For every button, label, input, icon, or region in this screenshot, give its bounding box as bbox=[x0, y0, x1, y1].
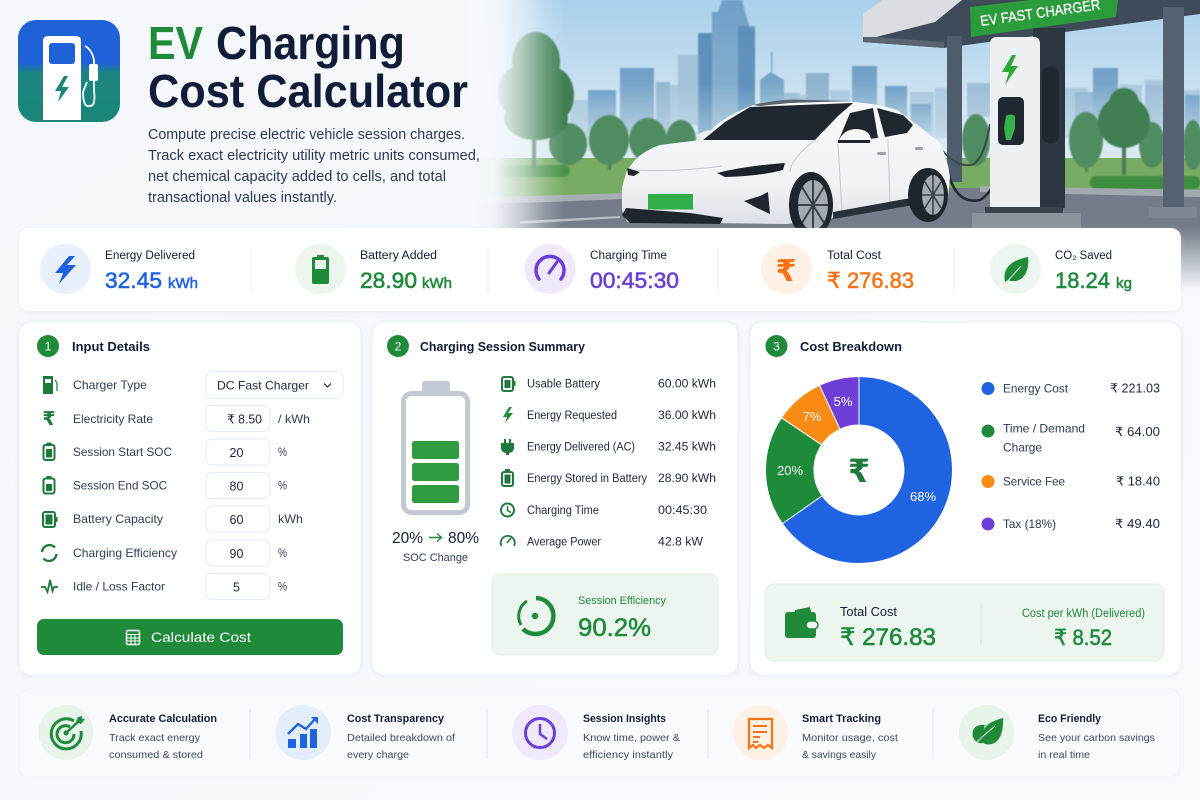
feature: eco friendly: Eco Friendly bbox=[1038, 713, 1102, 725]
feature: session insights: Session Insights bbox=[583, 713, 666, 725]
metric: battery added: Battery Added bbox=[360, 250, 437, 262]
panel: cost breakdown bbox=[750, 322, 1181, 675]
step badge 1 bbox=[37, 335, 59, 357]
legend: service fee bbox=[982, 474, 1160, 488]
rear wheel bbox=[908, 168, 948, 222]
mirrors bbox=[698, 129, 871, 143]
row: charger type: DC Fast Charger bbox=[217, 378, 309, 392]
metric: energy delivered: kWh bbox=[168, 275, 198, 292]
SOC change label: 20% bbox=[392, 530, 423, 547]
metric: energy delivered bbox=[40, 244, 198, 294]
charger station bbox=[972, 28, 1081, 228]
row: charger type bbox=[43, 372, 343, 398]
car body bbox=[622, 100, 950, 224]
summary row: charging time: Charging Time bbox=[527, 505, 599, 517]
session efficiency callout: 90.2% bbox=[578, 614, 651, 642]
legend: service fee: ₹ 18.40 bbox=[1116, 474, 1160, 488]
summary row: average power bbox=[501, 536, 703, 548]
intro paragraph bbox=[148, 127, 480, 206]
metric: energy delivered: 32.45 bbox=[105, 268, 162, 293]
summary row: energy delivered: Energy Delivered (AC) bbox=[527, 442, 635, 454]
row: session start SOC bbox=[44, 439, 287, 465]
row: electricity rate bbox=[42, 406, 310, 432]
body panel lines bbox=[634, 140, 890, 212]
summary row: charging time bbox=[501, 504, 707, 517]
title bbox=[148, 17, 468, 117]
intro paragraph: Compute precise electric vehicle session charges. bbox=[148, 127, 465, 143]
horizon haze bbox=[570, 92, 1200, 150]
legend: energy cost bbox=[982, 382, 1160, 396]
SOC change label: 80% bbox=[448, 530, 479, 547]
legend: energy cost: ₹ 221.03 bbox=[1110, 382, 1160, 396]
summary row: energy requested bbox=[503, 407, 716, 423]
panel: feature strip bbox=[19, 689, 1180, 777]
feature: session insights: efficiency instantly bbox=[583, 749, 674, 761]
metric: charging time bbox=[524, 244, 679, 294]
heading: input details: Input Details bbox=[72, 339, 150, 354]
row: electricity rate: ₹ 8.50 bbox=[227, 412, 262, 426]
row: electricity rate: Electricity Rate bbox=[73, 412, 153, 426]
row: charging efficiency bbox=[42, 540, 287, 566]
SOC change label: SOC Change bbox=[403, 552, 468, 564]
feature: cost transparency: Detailed breakdown of bbox=[347, 732, 455, 744]
legend: service fee: Service Fee bbox=[1003, 474, 1065, 488]
row: idle and loss factor: % bbox=[278, 580, 287, 594]
legend: time and demand charge bbox=[982, 422, 1160, 454]
feature: cost transparency: Cost Transparency bbox=[347, 713, 445, 725]
row: idle and loss factor bbox=[41, 574, 287, 600]
button: calculate cost: Calculate Cost bbox=[151, 629, 251, 645]
side windows bbox=[838, 108, 913, 142]
feature: eco friendly: See your carbon savings bbox=[1038, 732, 1155, 744]
summary row: energy requested: 36.00 kWh bbox=[658, 410, 716, 422]
panel: input details bbox=[19, 322, 361, 675]
slice: time and demand charge bbox=[766, 418, 822, 524]
row: session end SOC: 80 bbox=[230, 480, 243, 494]
slice: energy cost bbox=[782, 376, 953, 563]
trees bbox=[498, 32, 1200, 189]
lawn bbox=[496, 158, 1200, 197]
metric: CO2 saved: CO₂ Saved bbox=[1055, 250, 1112, 262]
feature: cost transparency: every charge bbox=[347, 749, 409, 761]
summary row: usable battery bbox=[502, 377, 716, 391]
grille and lower intake bbox=[622, 208, 723, 224]
summary row: energy requested: Energy Requested bbox=[527, 410, 617, 422]
intro paragraph: Track exact electricity utility metric units consumed, bbox=[148, 148, 480, 164]
total cost callout: ₹ 8.52 bbox=[1054, 625, 1112, 650]
metric: CO2 saved: kg bbox=[1116, 275, 1132, 292]
row: charging efficiency: 90 bbox=[230, 547, 243, 561]
donut chart: ₹ bbox=[848, 453, 870, 489]
feature: smart tracking: Monitor usage, cost bbox=[802, 732, 898, 744]
legend: energy cost: Energy Cost bbox=[1003, 382, 1069, 396]
feature: accurate calculation: consumed & stored bbox=[109, 749, 203, 761]
battery graphic bbox=[404, 381, 468, 512]
feature: session insights bbox=[512, 705, 680, 761]
panel: charging session summary bbox=[372, 322, 738, 675]
donut chart bbox=[766, 376, 953, 563]
session efficiency callout: Session Efficiency bbox=[578, 595, 666, 607]
row: idle and loss factor: 5 bbox=[233, 580, 240, 594]
metric: battery added bbox=[295, 244, 452, 294]
car bbox=[622, 100, 950, 238]
intro paragraph: net chemical capacity added to cells, and total bbox=[148, 169, 446, 185]
headlights bbox=[627, 163, 785, 177]
legend: tax: ₹ 49.40 bbox=[1115, 517, 1160, 531]
hero illustration: electric car at fast charger bbox=[470, 0, 1200, 290]
donut chart: 68% bbox=[910, 489, 936, 504]
row: battery capacity: kWh bbox=[278, 512, 303, 526]
summary row: average power: Average Power bbox=[527, 536, 601, 548]
feature: smart tracking bbox=[733, 705, 898, 761]
metric: total cost: ₹ 276.83 bbox=[827, 268, 914, 293]
session efficiency callout bbox=[492, 574, 718, 655]
feature: smart tracking: Smart Tracking bbox=[802, 713, 881, 725]
slice: tax bbox=[820, 376, 859, 429]
total cost callout: Total Cost bbox=[840, 604, 897, 619]
row: battery capacity bbox=[43, 506, 303, 532]
metric: total cost: Total Cost bbox=[827, 250, 882, 262]
sill bbox=[833, 198, 910, 219]
front wheel bbox=[789, 172, 833, 228]
metric: charging time: 00:45:30 bbox=[590, 268, 679, 293]
feature: accurate calculation: Track exact energy bbox=[109, 732, 201, 744]
row: battery capacity: 60 bbox=[230, 513, 243, 527]
summary row: energy delivered bbox=[501, 439, 716, 455]
feature: accurate calculation bbox=[38, 705, 217, 761]
door handles bbox=[877, 147, 923, 155]
canopy columns bbox=[947, 7, 1197, 218]
green licence plate bbox=[648, 194, 693, 210]
metric: battery added: 28.90 bbox=[360, 268, 417, 293]
donut chart: 5% bbox=[834, 394, 853, 409]
summary row: energy delivered: 32.45 kWh bbox=[658, 442, 716, 454]
total cost callout bbox=[765, 584, 1164, 661]
icon: wallet bbox=[785, 607, 818, 638]
row: electricity rate: ₹ bbox=[42, 409, 56, 430]
heading: cost breakdown: Cost Breakdown bbox=[800, 339, 902, 354]
feature: smart tracking: & savings easily bbox=[802, 749, 877, 761]
intro paragraph: transactional values instantly. bbox=[148, 190, 337, 206]
left fade bbox=[470, 0, 561, 228]
road bbox=[470, 188, 1200, 290]
button: calculate cost bbox=[37, 619, 343, 655]
total cost callout: ₹ 276.83 bbox=[840, 624, 936, 651]
metric: total cost bbox=[761, 244, 914, 294]
summary row: energy stored bbox=[502, 469, 716, 486]
legend: time and demand charge: ₹ 64.00 bbox=[1115, 425, 1160, 439]
row: charging efficiency: % bbox=[278, 546, 287, 560]
row: session end SOC: Session End SOC bbox=[73, 478, 167, 492]
step badge 2: 2 bbox=[395, 340, 402, 354]
summary row: usable battery: 60.00 kWh bbox=[658, 378, 716, 390]
row: electricity rate: / kWh bbox=[278, 412, 310, 426]
app icon: EV charging pump bbox=[18, 20, 120, 122]
title: EV bbox=[148, 17, 203, 69]
summary row: energy stored: 28.90 kWh bbox=[658, 473, 716, 485]
row: session end SOC: % bbox=[278, 478, 287, 492]
roof edge bbox=[753, 100, 850, 106]
city skyline bbox=[570, 0, 1200, 150]
charging cable bbox=[942, 124, 990, 202]
legend: time and demand charge: Time / Demand bbox=[1003, 422, 1085, 436]
metric: CO2 saved bbox=[990, 244, 1132, 294]
metric: CO2 saved: 18.24 bbox=[1055, 268, 1110, 293]
step badge 1: 1 bbox=[45, 340, 52, 354]
metric: energy delivered: Energy Delivered bbox=[105, 250, 195, 262]
slice: service fee bbox=[782, 385, 840, 445]
step badge 3 bbox=[766, 335, 788, 357]
summary row: energy stored: Energy Stored in Battery bbox=[527, 473, 647, 485]
step badge 3: 3 bbox=[773, 340, 780, 354]
summary row: charging time: 00:45:30 bbox=[658, 505, 707, 517]
canopy bbox=[863, 0, 1200, 48]
feature: session insights: Know time, power & bbox=[583, 732, 680, 744]
title: Cost Calculator bbox=[148, 65, 468, 117]
legend: tax: Tax (18%) bbox=[1003, 517, 1056, 531]
summary row: usable battery: Usable Battery bbox=[527, 378, 600, 390]
row: charging efficiency: Charging Efficiency bbox=[73, 546, 177, 560]
donut chart: 20% bbox=[777, 463, 803, 478]
row: battery capacity: Battery Capacity bbox=[73, 512, 163, 526]
donut chart: 7% bbox=[803, 409, 822, 424]
row: idle and loss factor: Idle / Loss Factor bbox=[73, 580, 165, 594]
title: Charging bbox=[216, 17, 405, 69]
row: charger type: Charger Type bbox=[73, 378, 147, 392]
feature: eco friendly bbox=[959, 705, 1155, 761]
row: session start SOC: 20 bbox=[230, 446, 243, 460]
feature: accurate calculation: Accurate Calculation bbox=[109, 713, 217, 725]
lower road strip bbox=[1180, 232, 1200, 290]
panel: key metrics strip bbox=[19, 228, 1181, 311]
feature: eco friendly: in real time bbox=[1038, 749, 1090, 761]
feature: cost transparency bbox=[275, 705, 455, 761]
step badge 2 bbox=[387, 335, 409, 357]
legend: time and demand charge: Charge bbox=[1003, 440, 1042, 454]
sky bbox=[500, 0, 1200, 158]
row: session start SOC: Session Start SOC bbox=[73, 445, 172, 459]
row: session end SOC bbox=[44, 472, 287, 498]
metric: charging time: Charging Time bbox=[590, 250, 667, 262]
legend: tax bbox=[982, 517, 1160, 531]
SOC change label bbox=[392, 530, 479, 564]
heading: session summary: Charging Session Summary bbox=[420, 339, 586, 354]
summary row: average power: 42.8 kW bbox=[658, 536, 703, 548]
metric: battery added: kWh bbox=[422, 275, 452, 292]
total cost callout: Cost per kWh (Delivered) bbox=[1022, 608, 1145, 620]
row: session start SOC: % bbox=[278, 445, 287, 459]
metric: total cost: ₹ bbox=[776, 255, 796, 288]
windshield bbox=[703, 103, 853, 140]
